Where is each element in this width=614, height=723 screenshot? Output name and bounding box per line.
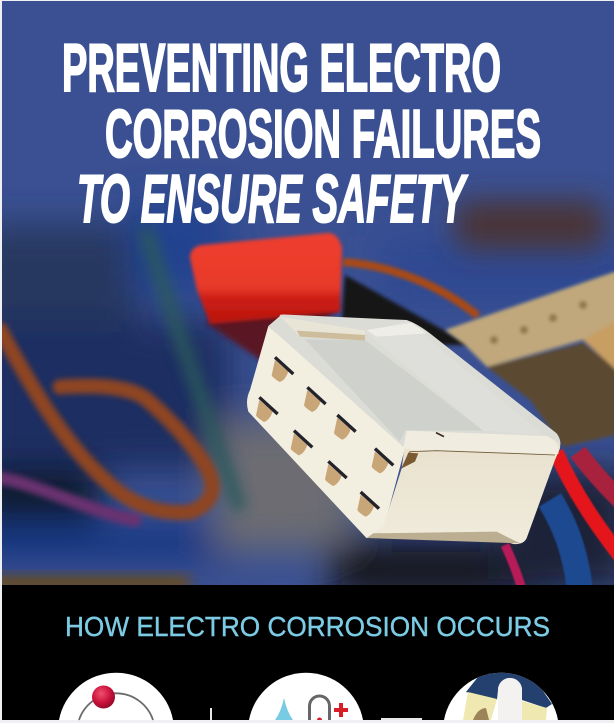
icon: ion orbit circle: [59, 673, 173, 720]
blurred wires at left: [0, 330, 212, 520]
foreground connector: [247, 314, 560, 544]
connector left face with sockets: [247, 326, 405, 538]
icon: corroded circuit board circle: [444, 672, 558, 720]
section heading: HOW ELECTRO CORROSION OCCURS: [65, 611, 550, 642]
plus sign: [210, 708, 212, 720]
icon: water drop and thermometer circle: [249, 673, 363, 720]
blurred brown shadow at top right: [455, 200, 605, 250]
blurred beige connector: [445, 272, 614, 447]
wires at right: [505, 452, 614, 590]
black lower panel: [2, 585, 614, 720]
equals sign: [381, 718, 422, 720]
connector front end: [376, 439, 560, 544]
blurred red connector: [190, 233, 478, 368]
connector top face: [268, 314, 560, 457]
blurred amber strip at bottom left: [0, 576, 190, 592]
title: [62, 30, 541, 237]
blurred green wire: [145, 228, 240, 510]
